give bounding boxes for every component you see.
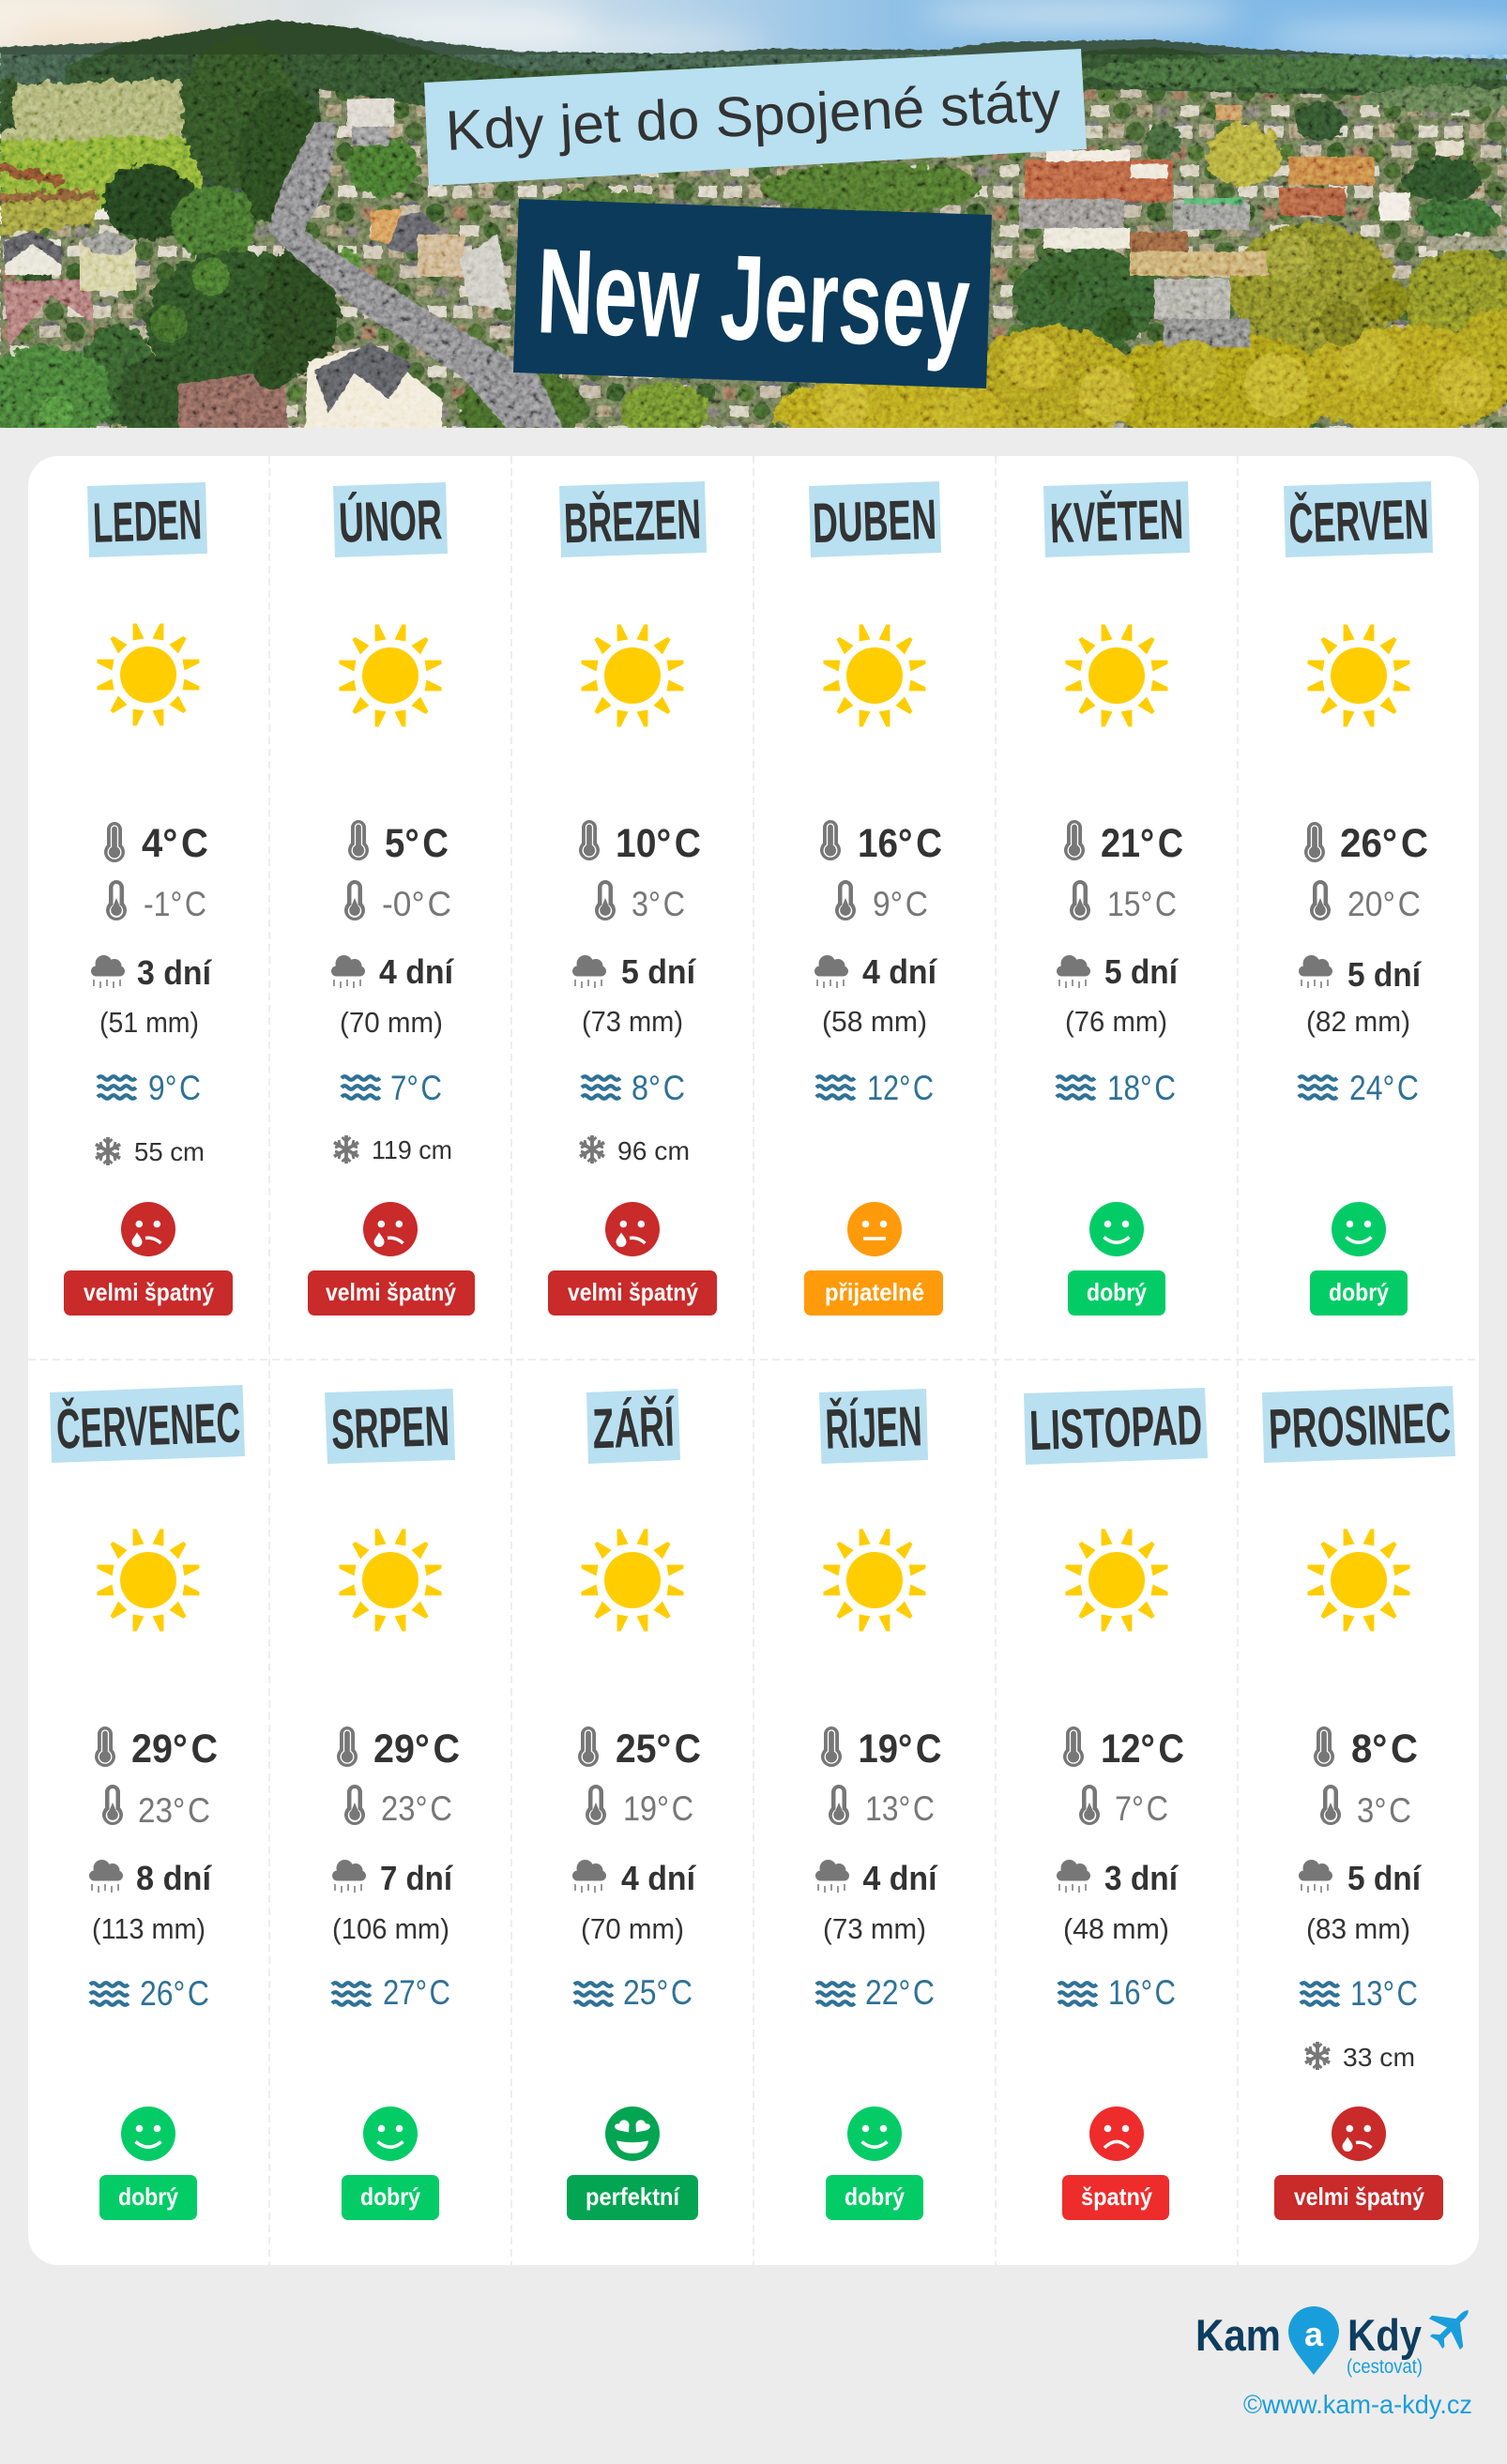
rating badge: špatný	[1081, 2183, 1152, 2211]
icon: sad face	[1089, 2107, 1144, 2161]
rainy days: 8 dní	[136, 1859, 212, 1897]
icon: max temperature	[1064, 820, 1085, 860]
icon: sun	[98, 1529, 199, 1631]
icon: snow	[580, 1135, 604, 1164]
precipitation: (70 mm)	[581, 1912, 684, 1945]
rating badge	[1068, 1270, 1165, 1316]
precipitation: (76 mm)	[1065, 1005, 1167, 1038]
right side buildings	[1025, 160, 1173, 202]
heading: KVĚTEN: KVĚTEN	[1049, 488, 1184, 555]
min temperature value: 13°C	[865, 1789, 935, 1828]
precipitation: (48 mm)	[1063, 1912, 1169, 1945]
min temperature value: 23°C	[381, 1789, 452, 1828]
month: ŘÍJEN	[815, 1389, 942, 2220]
icon: rain	[1057, 1860, 1090, 1893]
header photo: aerial view of New Jersey town	[0, 0, 1507, 449]
rainy days: 3 dní	[137, 953, 212, 992]
heading: DUBEN: DUBEN	[812, 488, 937, 555]
icon: min temperature	[1320, 1785, 1341, 1825]
month: ČERVENEC	[50, 1385, 245, 2220]
icon: snow	[334, 1135, 358, 1164]
month: KVĚTEN	[1043, 481, 1190, 1316]
icon: max temperature	[95, 1726, 115, 1767]
month: BŘEZEN	[548, 481, 717, 1316]
icon: neutral face	[847, 1202, 902, 1256]
precipitation: (113 mm)	[92, 1912, 206, 1945]
icon: happy face	[1332, 1202, 1386, 1256]
rating badge	[1310, 1270, 1408, 1316]
icon: sea	[90, 1983, 129, 2005]
icon: happy face	[1089, 1202, 1144, 1256]
max temperature value: 21°C	[1101, 821, 1183, 866]
icon: max temperature	[337, 1726, 358, 1767]
icon: sea	[342, 1076, 380, 1099]
icon: sun	[824, 1529, 925, 1631]
sea temperature: 9°C	[148, 1069, 201, 1107]
icon: sun	[582, 1529, 683, 1631]
icon: rain	[1057, 955, 1090, 988]
month: ČERVEN	[1284, 481, 1433, 1316]
rating badge: velmi špatný	[84, 1278, 214, 1306]
yellow canopy	[975, 323, 1126, 428]
icon: sea	[1057, 1076, 1095, 1099]
sea temperature: 8°C	[632, 1069, 685, 1107]
rainy days: 3 dní	[1104, 1859, 1179, 1897]
max temperature value: 29°C	[131, 1726, 218, 1772]
heading: ÚNOR: ÚNOR	[338, 488, 443, 555]
max temperature value: 25°C	[616, 1726, 701, 1772]
icon: max temperature	[104, 822, 125, 862]
icon: min temperature	[835, 880, 856, 920]
sea temperature: 26°C	[140, 1974, 209, 2013]
rating badge: dobrý	[360, 2183, 420, 2211]
precipitation: (58 mm)	[822, 1005, 927, 1038]
rating badge: velmi špatný	[568, 1278, 698, 1306]
icon: sun	[340, 1529, 441, 1631]
rainy days: 4 dní	[863, 1859, 937, 1897]
min temperature value: -0°C	[382, 885, 451, 923]
month: LEDEN	[64, 482, 233, 1316]
icon: sea	[816, 1076, 855, 1099]
icon: airplane	[1421, 2295, 1484, 2358]
heading: ŘÍJEN: ŘÍJEN	[824, 1394, 923, 1461]
logo: Kam a Kdy	[1195, 2295, 1484, 2419]
icon: rain	[815, 1860, 849, 1893]
icon: happy face	[847, 2107, 902, 2161]
icon: max temperature	[348, 820, 369, 860]
icon: min temperature	[106, 880, 127, 920]
sea temperature: 27°C	[383, 1973, 450, 2012]
rating badge	[567, 2175, 698, 2220]
rating badge: dobrý	[845, 2183, 905, 2211]
rating badge: dobrý	[1329, 1278, 1389, 1306]
icon: very bad face	[1332, 2107, 1386, 2161]
heading: LISTOPAD	[1024, 1388, 1208, 1465]
icon: min temperature	[344, 1785, 365, 1825]
trees next to houses	[347, 137, 419, 197]
icon: snow	[96, 1137, 120, 1165]
heading: SRPEN: SRPEN	[330, 1394, 450, 1461]
rating badge	[1274, 2175, 1443, 2220]
icon: sea	[574, 1983, 613, 2005]
rainy days: 7 dní	[380, 1859, 453, 1897]
precipitation: (70 mm)	[340, 1006, 443, 1039]
icon: max temperature	[579, 820, 600, 860]
heading: ČERVENEC: ČERVENEC	[55, 1391, 241, 1461]
max temperature value: 16°C	[858, 821, 942, 866]
rainy days: 5 dní	[1104, 952, 1179, 991]
icon: sea	[1058, 1983, 1097, 2005]
icon: sea	[332, 1983, 371, 2005]
precipitation: (73 mm)	[582, 1005, 683, 1038]
heading: ŘÍJEN	[819, 1389, 928, 1464]
min temperature value: 23°C	[138, 1791, 210, 1830]
icon: happy face	[363, 2107, 418, 2161]
sea temperature: 25°C	[623, 1973, 693, 2012]
month: PROSINEC	[1262, 1386, 1455, 2220]
heading: SRPEN	[325, 1389, 455, 1464]
forest shading on right slope	[1079, 56, 1507, 90]
month: LISTOPAD	[1024, 1388, 1208, 2220]
dark tree belt	[181, 38, 297, 188]
sea temperature: 13°C	[1350, 1974, 1418, 2013]
heading: ČERVENEC	[50, 1385, 245, 1463]
icon: min temperature	[829, 1785, 849, 1825]
min temperature value: 7°C	[1115, 1789, 1168, 1828]
banner: New Jersey	[513, 199, 992, 388]
sea temperature: 16°C	[1108, 1973, 1176, 2012]
rainy days: 5 dní	[1347, 955, 1422, 994]
rainy days: 4 dní	[379, 952, 454, 991]
icon: rain	[331, 955, 365, 988]
icon: min temperature	[102, 1785, 123, 1825]
max temperature value: 4°C	[142, 821, 208, 866]
icon: sun	[1308, 1529, 1409, 1631]
rating badge	[342, 2175, 439, 2220]
rating badge	[308, 1270, 475, 1316]
website: ©www.kam-a-kdy.cz	[1243, 2390, 1472, 2419]
icon: sun	[1066, 625, 1167, 726]
rating badge: dobrý	[118, 2183, 178, 2211]
icon: rain	[572, 1860, 606, 1893]
icon: sea	[1301, 1983, 1339, 2005]
rainy days: 4 dní	[862, 952, 937, 991]
icon: rain	[332, 1860, 366, 1893]
sea temperature: 22°C	[865, 1973, 935, 2012]
icon: sea	[816, 1983, 855, 2005]
precipitation: (73 mm)	[823, 1912, 926, 1945]
precipitation: (51 mm)	[99, 1006, 199, 1039]
snowfall: 33 cm	[1343, 2043, 1415, 2072]
max temperature value: 10°C	[616, 821, 701, 866]
icon: snow	[1305, 2042, 1330, 2070]
logo word: Kdy: Kdy	[1347, 2310, 1422, 2360]
heading: LEDEN	[87, 482, 207, 557]
cemetery	[0, 80, 192, 150]
icon: max temperature	[578, 1726, 599, 1767]
icon: rain	[1299, 955, 1332, 988]
panel: monthly climate card	[28, 456, 1479, 2265]
town base	[0, 89, 1507, 428]
icon: min temperature	[1310, 880, 1331, 920]
max temperature value: 12°C	[1101, 1726, 1184, 1772]
icon: min temperature	[1079, 1785, 1100, 1825]
heading: ZÁŘÍ: ZÁŘÍ	[591, 1395, 676, 1460]
icon: sea	[1299, 1076, 1337, 1099]
month: DUBEN	[804, 481, 943, 1316]
icon: max temperature	[820, 820, 841, 860]
banner: Kdy jet do Spojené státy: Kdy jet do Spojené státy	[444, 69, 1062, 162]
icon: very bad face	[605, 1202, 660, 1256]
min temperature value: 9°C	[873, 885, 928, 923]
max temperature value: 26°C	[1340, 821, 1428, 866]
rating badge	[804, 1270, 943, 1316]
rating badge: velmi špatný	[1294, 2183, 1424, 2211]
rainy days: 4 dní	[621, 1859, 696, 1897]
trees above navy banner	[760, 163, 985, 212]
month: SRPEN	[325, 1389, 460, 2220]
logo word: Kam: Kam	[1195, 2310, 1281, 2360]
icon: sea	[582, 1076, 620, 1099]
icon: sun	[582, 625, 683, 726]
rainy days: 5 dní	[1347, 1859, 1422, 1897]
sea temperature: 24°C	[1349, 1069, 1419, 1107]
photo grain	[0, 54, 1507, 428]
tree highlights	[1004, 333, 1060, 389]
icon: rain	[89, 1860, 123, 1893]
heading: BŘEZEN	[559, 481, 707, 557]
max temperature value: 8°C	[1351, 1726, 1418, 1772]
min temperature value: 3°C	[1357, 1791, 1411, 1830]
icon: sun	[340, 625, 441, 726]
icon: very bad face	[363, 1202, 418, 1256]
max temperature value: 5°C	[385, 821, 449, 866]
icon: rain	[814, 955, 848, 988]
month: ZÁŘÍ	[567, 1389, 701, 2220]
min temperature value: -1°C	[144, 885, 206, 923]
icon: sun	[1308, 625, 1409, 726]
heading: BŘEZEN: BŘEZEN	[563, 488, 702, 555]
rainy days: 5 dní	[621, 952, 696, 991]
icon: map pin	[1288, 2306, 1339, 2375]
rating badge	[826, 2175, 923, 2220]
road	[267, 122, 563, 428]
icon: sun	[98, 623, 199, 726]
precipitation: (83 mm)	[1306, 1912, 1410, 1945]
icon: sun	[824, 625, 925, 726]
icon: sun	[1066, 1529, 1167, 1631]
rating badge	[548, 1270, 717, 1316]
min temperature value: 20°C	[1347, 885, 1421, 923]
icon: min temperature	[586, 1785, 606, 1825]
olive trees	[1229, 223, 1398, 358]
icon: rain	[91, 955, 125, 988]
heading: ČERVEN	[1284, 481, 1433, 557]
icon: rain	[572, 955, 606, 988]
rating badge	[64, 1270, 233, 1316]
rating badge: dobrý	[1087, 1278, 1147, 1306]
logo letter: a: a	[1304, 2315, 1324, 2353]
precipitation: (82 mm)	[1306, 1005, 1410, 1038]
max temperature value: 29°C	[373, 1726, 460, 1772]
min temperature value: 19°C	[623, 1789, 693, 1828]
heading: KVĚTEN	[1043, 481, 1190, 557]
icon: max temperature	[1314, 1726, 1334, 1767]
banner: New Jersey: New Jersey	[535, 223, 972, 373]
big left trees	[145, 251, 324, 397]
heading: LEDEN: LEDEN	[92, 488, 203, 555]
bottom middle	[456, 373, 586, 428]
heading: DUBEN	[809, 481, 941, 557]
rating badge: perfektní	[586, 2183, 680, 2211]
rating badge	[99, 2175, 197, 2220]
icon: max temperature	[821, 1726, 842, 1767]
icon: very bad face	[121, 1202, 175, 1256]
snowfall: 119 cm	[372, 1135, 452, 1164]
snowfall: 96 cm	[617, 1136, 690, 1165]
rating badge	[1062, 2175, 1169, 2220]
rating badge: přijatelné	[825, 1278, 924, 1306]
icon: min temperature	[1070, 880, 1090, 920]
icon: happy face	[121, 2107, 175, 2161]
max temperature value: 19°C	[858, 1726, 942, 1772]
dark-green centre tree	[1013, 247, 1160, 350]
icon: min temperature	[344, 880, 365, 920]
month: ÚNOR	[308, 482, 475, 1316]
rating badge: velmi špatný	[326, 1278, 456, 1306]
right town trees	[1207, 123, 1282, 187]
icon: max temperature	[1304, 822, 1325, 862]
min temperature value: 15°C	[1107, 885, 1177, 923]
icon: max temperature	[1063, 1726, 1084, 1767]
logo subtitle: (cestovat)	[1347, 2356, 1423, 2378]
sea temperature: 7°C	[390, 1069, 442, 1107]
heading: ZÁŘÍ	[586, 1389, 680, 1464]
heading: ÚNOR	[333, 482, 448, 557]
roofed houses	[305, 344, 442, 432]
min temperature value: 3°C	[632, 885, 685, 923]
sea temperature: 18°C	[1107, 1069, 1176, 1107]
icon: rain	[1299, 1860, 1332, 1893]
icon: min temperature	[595, 880, 616, 920]
banner: Kdy jet do Spojené státy	[424, 49, 1087, 186]
snowfall: 55 cm	[134, 1137, 205, 1166]
precipitation: (106 mm)	[332, 1912, 449, 1945]
icon: sea	[98, 1076, 136, 1099]
sea temperature: 12°C	[867, 1069, 934, 1107]
icon: heart-eyes face	[605, 2107, 660, 2161]
heading: LISTOPAD: LISTOPAD	[1028, 1393, 1203, 1462]
